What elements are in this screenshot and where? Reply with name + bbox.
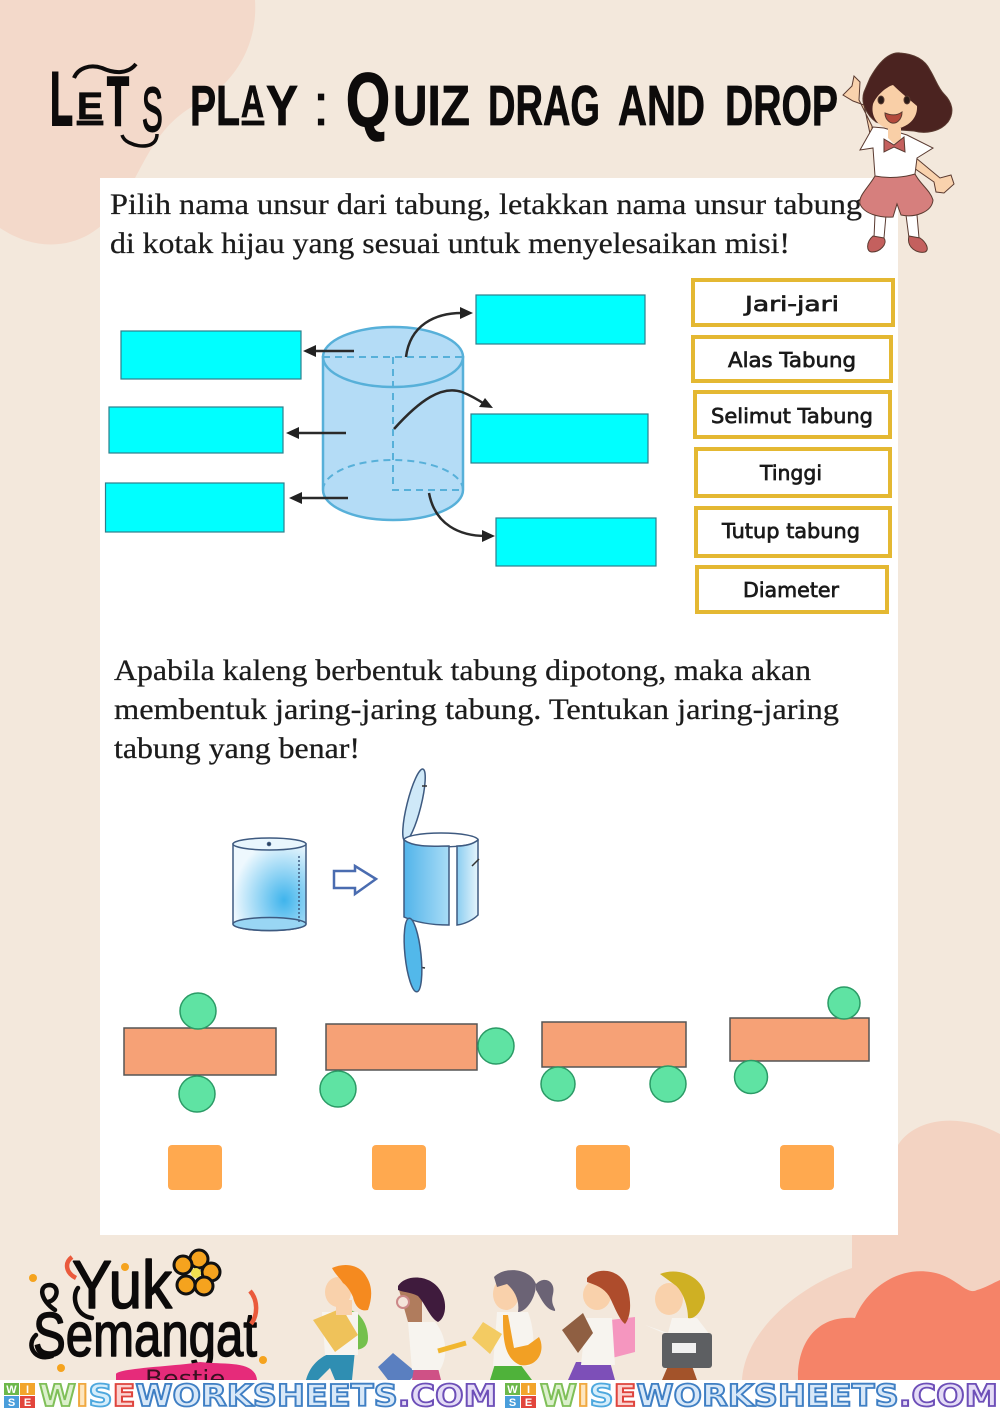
answer checkboxes [168, 1145, 834, 1190]
watermark logo left: W [6, 1384, 17, 1396]
kid 5 [645, 1271, 712, 1380]
title: L [50, 57, 73, 142]
watermark logo right [505, 1383, 536, 1409]
title: DRAG [488, 74, 600, 138]
instruction text 2 [114, 654, 839, 765]
instruction text 1 [110, 188, 862, 260]
answer choice buttons: Alas Tabung [728, 348, 856, 372]
watermark logo left [4, 1383, 35, 1409]
background blob: top left [0, 0, 255, 244]
figure: cylinder cut into net [233, 767, 479, 993]
logo: Yuk Semangat Bestie: Bestie... [145, 1367, 250, 1392]
title: PL [190, 74, 240, 138]
background blob: bottom right [742, 1121, 1000, 1380]
answer choice buttons: Tinggi [759, 461, 822, 485]
watermark logo right: W [507, 1384, 518, 1396]
title: DROP [725, 74, 838, 138]
net option 3 [541, 1022, 686, 1102]
title: UIZ [393, 74, 470, 138]
watermark logo right: E [525, 1397, 532, 1409]
instruction text 2: tabung yang benar! [114, 732, 360, 765]
logo: Yuk Semangat Bestie: Yuk [72, 1247, 173, 1323]
kid 4 [562, 1271, 635, 1380]
answer choice buttons [693, 280, 893, 612]
kid 3 [472, 1270, 555, 1380]
title: AND [618, 74, 705, 138]
answer choice buttons: Diameter [743, 578, 840, 602]
cylinder diagram with arrows [286, 307, 495, 542]
instruction text 2: Apabila kaleng berbentuk tabung dipotong, maka akan [114, 654, 811, 687]
title: E [77, 86, 103, 128]
title: A [241, 76, 264, 127]
logo: Yuk Semangat Bestie: Semangat [33, 1301, 257, 1370]
answer choice buttons: Selimut Tabung [711, 404, 873, 428]
answer drop boxes [106, 295, 656, 566]
net option 2 [320, 1024, 514, 1107]
net option 1 [124, 993, 276, 1112]
kid 1 [306, 1265, 371, 1380]
instruction text 1: di kotak hijau yang sesuai untuk menyelesaikan misi! [110, 227, 790, 260]
title: T [107, 62, 129, 140]
panel: white worksheet [100, 178, 898, 1235]
watermark logo right: S [509, 1397, 516, 1409]
watermark text right: WISEWORKSHEETS .COM [540, 1379, 998, 1414]
instruction text 1: Pilih nama unsur dari tabung, letakkan nama unsur tabung [110, 188, 862, 221]
watermark text left: WISEWORKSHEETS .COM [39, 1379, 497, 1414]
watermark logo left: E [24, 1397, 31, 1409]
watermark logo right: I [527, 1384, 530, 1396]
answer choice buttons: Tutup tabung [721, 519, 860, 543]
watermark logo left: I [26, 1384, 29, 1396]
watermark logo left: S [8, 1397, 15, 1409]
title: : [313, 73, 329, 138]
icon: girl character [843, 53, 954, 252]
net option 4 [730, 987, 869, 1094]
instruction text 2: membentuk jaring-jaring tabung. Tentukan jaring-jaring [114, 693, 839, 726]
logo: Yuk Semangat Bestie [29, 1247, 267, 1392]
kid 2 [378, 1277, 466, 1380]
title: Q [346, 58, 390, 143]
watermark band [0, 1380, 1000, 1414]
title: S [142, 75, 163, 145]
answer choice buttons: Jari-jari [742, 292, 839, 316]
title: Y [266, 74, 298, 138]
title [50, 57, 838, 146]
icon: flower [174, 1250, 220, 1295]
